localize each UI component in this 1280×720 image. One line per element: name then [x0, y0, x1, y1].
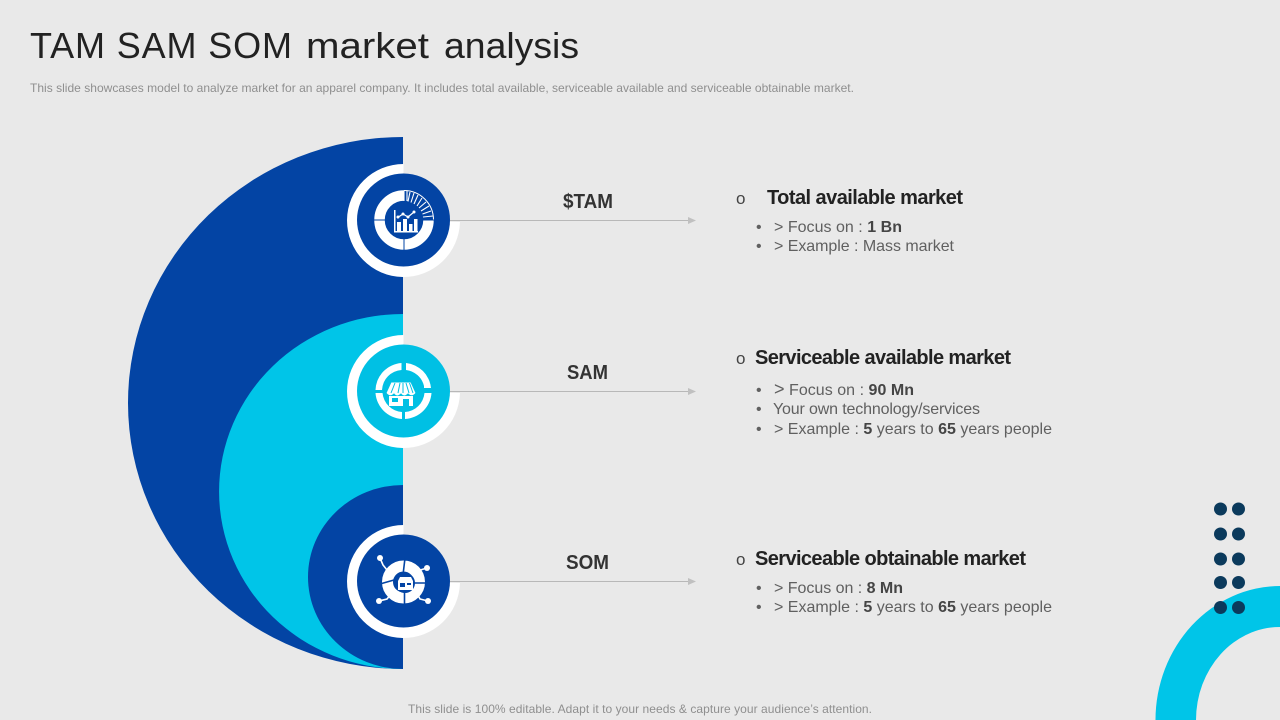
text block: Serviceable available market: •	[756, 382, 762, 399]
text block: Total available market: o	[736, 189, 745, 208]
text block: Total available market: > Example : Mass market	[774, 238, 955, 255]
text block: Serviceable available market: Your own technology/services	[773, 401, 980, 418]
text block: Total available market: •	[756, 219, 762, 236]
arrow: SOM	[450, 578, 696, 585]
text block: Total available market	[736, 187, 963, 255]
label: SAM: SAM	[567, 362, 608, 384]
subtitle: This slide showcases model to analyze market for an apparel company. It includes total available, serviceable available and serviceable obtainable market.	[30, 81, 854, 95]
icon: SAM store badge	[347, 335, 460, 448]
text block: Serviceable obtainable market: > Focus on : 8 Mn	[774, 580, 903, 597]
title: TAM SAM SOM	[30, 25, 292, 66]
arrow: TAM	[450, 217, 696, 224]
text block: Serviceable obtainable market: > Example : 5 years to 65 years people	[774, 599, 1052, 616]
text block: Serviceable available market: •	[756, 421, 762, 438]
text block: Serviceable available market: •	[756, 401, 762, 418]
text block: Serviceable obtainable market: o	[736, 550, 745, 569]
text block: Serviceable available market	[736, 347, 1052, 438]
half circle: SOM	[308, 485, 403, 669]
label: $TAM: $TAM	[563, 191, 613, 213]
text block: Serviceable obtainable market: •	[756, 599, 762, 616]
title: market	[306, 25, 429, 66]
half circle: TAM	[128, 137, 403, 669]
decorative ring: bottom right	[1155, 586, 1280, 720]
text block: Serviceable obtainable market: •	[756, 580, 762, 597]
icon: TAM chart badge	[347, 164, 460, 277]
title	[30, 25, 579, 66]
title: analysis	[444, 25, 579, 66]
footer note: This slide is 100% editable. Adapt it to your needs & capture your audience’s attention.	[408, 702, 872, 716]
label: SOM: SOM	[566, 552, 609, 574]
nested half-circle diagram	[128, 137, 403, 669]
text block: Serviceable available market: o	[736, 349, 745, 368]
text block: Serviceable obtainable market: Serviceable obtainable market	[755, 548, 1026, 570]
text block: Serviceable available market: > Example : 5 years to 65 years people	[774, 421, 1052, 438]
text block: Serviceable available market: Serviceable available market	[755, 347, 1011, 369]
text block: Total available market: •	[756, 238, 762, 255]
text block: Serviceable obtainable market	[736, 548, 1052, 616]
half circle: SAM	[219, 314, 403, 669]
text block: Serviceable available market: > Focus on : 90 Mn	[774, 379, 914, 399]
dot grid: bottom right	[1214, 502, 1245, 614]
icon: SOM network store badge	[347, 525, 460, 638]
text block: Total available market: Total available market	[767, 187, 963, 209]
text block: Total available market: > Focus on : 1 Bn	[774, 219, 902, 236]
arrow: SAM	[450, 388, 696, 395]
